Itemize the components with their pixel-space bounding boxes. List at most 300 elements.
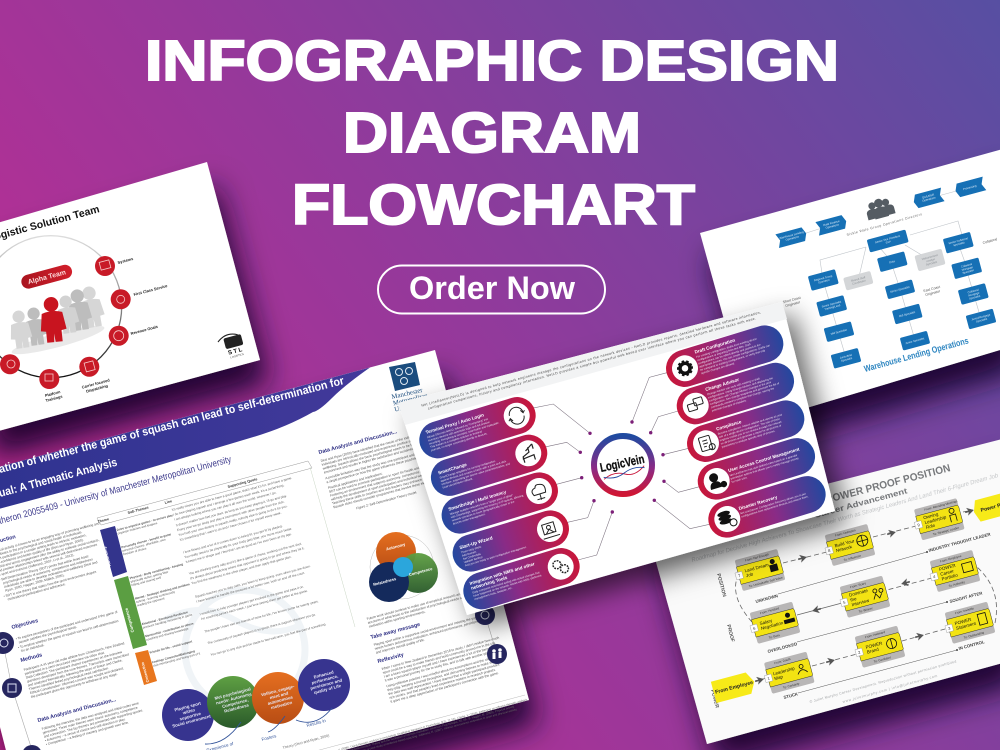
pill: start-up wizard: Set Credentials — [462, 552, 482, 561]
node labels: First Class Service — [133, 283, 169, 297]
reflexivity body: they play, keeping a journal throughout, and discussing themes to make sure — [387, 659, 496, 692]
step 7: land dream job: Land Dream — [744, 562, 769, 573]
table supporting quotes: I would love to help younger players get involved in the game and pass it on. — [199, 584, 305, 616]
poster body: methods: Data Collection: The participant shared experiences on the interview — [25, 650, 123, 680]
step 1: leadership map: To: Certainty — [782, 681, 800, 690]
connectors — [532, 372, 714, 561]
right column body: wellbeing. Squash allows the basic psychological needs to be fulfilled in a supportive — [322, 435, 443, 471]
panel: logicvein network diagram — [398, 302, 835, 615]
reflexivity body: I am a keen squash player myself and I have experienced a lot of the benefits; — [383, 645, 495, 679]
poster body: methods: the participant given the opportunity to withdraw at any stage. — [30, 672, 118, 699]
intro band — [398, 302, 787, 425]
order now button — [378, 266, 605, 314]
pill: draft configuration: configurations or importing from text files. Draft — [697, 342, 751, 362]
poster body: introduction: psychological needs of autonomy, competence and relatedness — [3, 557, 94, 585]
step 6: salary negotiation: 6 — [753, 625, 757, 631]
step 4: power career portfolio: From: Employee — [940, 554, 962, 563]
title: DIAGRAM — [343, 101, 641, 165]
STL logo: STL — [228, 347, 244, 357]
table subthemes: solving - learning continuously — [136, 590, 176, 604]
org chart box labels: Operation — [818, 278, 831, 285]
flow arrow heads — [754, 506, 975, 685]
connector dots — [579, 420, 666, 514]
intro text: configuration comparisons, history and compliancy information. NetLD provides a simple but powerful web based user interface where you can perform all these tasks with ease. — [428, 317, 756, 411]
org chart box labels: Junior Specialist — [905, 336, 925, 345]
step 4: power career portfolio: To: Authority — [948, 580, 966, 588]
pill: start-up wizard — [448, 506, 574, 576]
level lines — [778, 551, 958, 693]
org chart box labels: Senior Vice President — [875, 235, 900, 244]
org chart box labels: Junior/Mortgage — [971, 314, 991, 321]
ribbon labels: Operations — [825, 222, 840, 230]
node icons — [7, 260, 125, 381]
pill: smartchange: local cancel/close rollback. — [442, 476, 474, 489]
pill: draft configuration — [661, 321, 788, 392]
take away body: Playing sport within a supportive social environment and meeting the psychological — [373, 612, 491, 647]
reflexivity body: sport could be a way to make friends and build community around me in the city. — [382, 641, 496, 675]
pill: change advisor: configuration with Change Advisor changes to the prior — [708, 380, 772, 403]
body below venn: accounts of what leads to the satisfaction of psychological needs and self-determined — [367, 589, 489, 625]
level labels: OVERLOOKED — [767, 641, 798, 654]
table supporting quotes: It's really where you are able to have a good game, that's what it's for, and have a game. — [171, 476, 293, 512]
pill: terminal proxy: inventory devices with automatic login and full session — [428, 420, 491, 443]
table supporting quotes: It doesn't matter how fast you start, as long as you keep playing it, I'll go and play. — [175, 494, 288, 527]
step 8: build your network: Build Your — [834, 538, 855, 548]
originator labels: Collateral — [982, 237, 998, 245]
reflexivity body: Using reflective practice I was mindful about my assumptions and the role that — [386, 655, 497, 688]
pill: start-up wizard: Three easy steps: — [460, 544, 482, 554]
level labels — [755, 531, 992, 700]
poster body: objectives: for an individual. — [21, 643, 45, 653]
pill: terminal proxy: This feature is a complete solution to terminal — [430, 429, 483, 449]
table subthemes: Personally chosen - benefit to game — [121, 532, 172, 549]
table supporting quotes: You really need to be physically fit, your body gets fitter, you move much better. — [184, 527, 293, 559]
pill: smartbridge: network operators to cover geographically closer to the — [451, 499, 515, 522]
org chart connectors — [800, 190, 981, 358]
pill: smartchange — [426, 430, 552, 501]
right column body: Figure 2: Self-Determination Theory model — [356, 490, 417, 510]
pill: smartbridge: devices under management. — [452, 512, 486, 526]
table subthemes: organise matches and leagues — [117, 521, 158, 535]
node labels: Dispatching — [86, 383, 109, 394]
pill: integration with nms: management tools, Nmstate, etc. — [474, 586, 513, 601]
theme block: competence — [114, 576, 147, 649]
pill: start-up wizard: Start-Up Wizard — [459, 535, 493, 550]
table subthemes: personal choices, affordable, own — [122, 537, 166, 553]
panel: power proof position roadmap — [647, 437, 1000, 744]
pill: smartchange: interface, supporting per device value parameterization, and — [441, 461, 511, 486]
step 2: power brand: Brand — [866, 647, 880, 655]
table subthemes: physically active; getting fitter — [130, 570, 169, 584]
step 6: salary negotiation — [747, 602, 800, 645]
pill: draft configuration: specific changes are allowed. — [701, 361, 736, 375]
org chart box labels: Mortgage — [968, 291, 980, 298]
step 2: power brand — [852, 626, 905, 669]
flow arrows and labels: Theory (Deci and Ryan, 2000) — [282, 734, 330, 750]
pill: compliance: parameters to analyze specific step of devices. — [721, 429, 776, 449]
pill: change advisor: Change Advisor — [705, 377, 740, 392]
table supporting quotes: The people I have met are friends of mine for life, I've known some for twenty years. — [204, 599, 319, 634]
poster headings — [0, 429, 421, 724]
table subthemes: hitting and moving well — [131, 575, 162, 587]
panel: warehouse lending operations — [700, 147, 1000, 424]
step 3: power statement: POWER — [954, 617, 972, 626]
node labels: Systems — [117, 256, 134, 265]
level labels: SOUGHT AFTER — [949, 590, 984, 604]
ring — [0, 236, 122, 378]
pill: change advisor: configuration. See change snapshots and generate the list of — [709, 381, 780, 406]
table supporting quotes: It's something that I want to do and I have chosen it for myself every week. — [179, 511, 282, 542]
poster headings: Take away message — [370, 622, 421, 641]
poster body: discussion: • Autonomy – a sense of choice and self-direction in play. — [44, 717, 126, 743]
org chart box labels: Mid Specialist — [830, 328, 848, 336]
pill: draft configuration: appropriate devices. You can create configurations. Drafts can — [699, 343, 771, 369]
poster body: objectives: • To explore perceptions of the participant and understand if the game of — [15, 610, 118, 641]
ribbon labels — [779, 183, 977, 243]
node labels — [44, 256, 169, 403]
pill: integration with nms: Early compares automated syslog with actual changes that — [472, 570, 540, 595]
central logicvein logo: LogicVein — [599, 452, 646, 475]
pill: terminal proxy: Terminal Proxy / Auto Login — [425, 412, 485, 435]
step 9: owning leadership role: To: Strategic Leader — [932, 526, 959, 536]
self determination flow circles: Enhanced — [313, 669, 334, 680]
right column body: Practical applications and implications: — [327, 472, 383, 490]
step 4: power career portfolio — [927, 550, 980, 593]
step 1: leadership map — [761, 652, 815, 695]
reflexivity body: it was a personal journey for me to study this, and to talk with another player. — [384, 650, 494, 683]
side labels: PROOF — [725, 624, 735, 643]
take away body: and improves overall quality of life. — [375, 638, 425, 655]
org chart box labels: Training/Lead — [824, 303, 841, 311]
university logo: Manchester — [391, 387, 423, 401]
right column body: will help the development of sport participation and individual wellbeing. — [331, 471, 432, 502]
central logicvein logo — [594, 436, 652, 494]
poster body: introduction: individuals are able to develop motivation and wellbeing (Deci and — [4, 560, 98, 589]
pill: smartchange: against devices and creates a batch with a point and click — [440, 459, 507, 483]
directors label: Sickle Wale Group Operations Directors — [846, 212, 923, 237]
step 5: dominate the interview: Dominate — [848, 588, 868, 598]
right column body: Teaching these skills to coaches and club leaders may enhance motivation. — [332, 473, 439, 505]
level labels: IN CONTROL — [958, 639, 985, 651]
pill: user access control management — [693, 433, 820, 504]
pill: start-up wizard: Add Domain — [461, 549, 477, 558]
pill: terminal proxy — [415, 392, 540, 463]
step 7: land dream job: To: Unshakable Self Value — [748, 575, 783, 588]
poster body: methods: and analysed thematically, following the steps of Braun and Clarke. — [27, 658, 123, 687]
table supporting quotes: Every year we go away and play a tournament with other people from the club. — [177, 500, 285, 532]
panel: squash research poster — [0, 350, 530, 750]
table header: Supporting Quote — [227, 477, 258, 489]
end hexagon: power position — [971, 488, 1000, 523]
step 3: power statement — [942, 602, 995, 645]
table supporting quotes: I love fitness and a lot of it comes down to being fit, you get fit by playing. — [183, 524, 283, 554]
step 3: power statement: Statement — [955, 621, 977, 631]
org chart box labels: SVP — [885, 239, 892, 245]
theme block: connection — [135, 650, 157, 685]
service nodes — [0, 256, 131, 389]
right column body: environment and results in higher life satisfaction and sustained participation. — [323, 442, 433, 475]
org chart box labels: Specialist — [962, 268, 974, 275]
table header: Sub-Themes — [127, 506, 149, 515]
panel: logistic solution team — [0, 162, 260, 436]
table supporting quotes: It's always about predicting where that opponent is going to go and where they hit it. — [190, 546, 305, 581]
table subthemes: coaching and sharing knowledge — [146, 626, 189, 642]
org chart boxes — [808, 230, 996, 369]
step 9: owning leadership role: Role — [925, 523, 936, 530]
table subthemes: Mental - Strategic thinking and problem — [135, 582, 190, 601]
pill: integration with nms: networking Tools — [470, 575, 508, 591]
reflexivity body: It gave me a deep appreciation of the participant's connection with the game. — [390, 671, 499, 704]
title: INFOGRAPHIC DESIGN — [145, 29, 839, 93]
self determination flow circles: Volition, engage- — [260, 684, 295, 697]
warehouse lending operations heading: Warehouse Lending Operations — [863, 335, 970, 374]
take away body: needs fosters autonomous motivation, enhanced performance, persistence — [374, 619, 481, 651]
self determination flow circles: Social environment — [172, 713, 212, 729]
pill: smartchange: SmartChange — [437, 462, 468, 475]
step 7: land dream job: 7 — [738, 573, 742, 578]
side labels: POWER — [709, 689, 720, 709]
table supporting quotes: Squash teaches you to stay calm, you learn to keep going, even when you are down. — [195, 564, 311, 599]
pill: draft configuration: configurations can be edited directly and pushed to the — [698, 342, 762, 365]
university logo: Metropolitan — [392, 392, 429, 407]
step 5: dominate the interview: Interview — [851, 598, 870, 607]
pill: draft configuration: Draft Configuration — [694, 337, 736, 355]
pill: smartbridge: Smartbridge / Multi tenancy — [448, 489, 507, 512]
pill: change advisor: Change Advisor can work with existing or draft — [706, 376, 760, 396]
roadmap heading: Career Advancement — [813, 486, 909, 520]
alpha team badge: Alpha Team — [27, 269, 67, 286]
roadmap heading — [813, 462, 952, 520]
pill: disaster recovery — [704, 471, 830, 542]
table subthemes: Drive to organise games - to ensure play — [116, 513, 173, 532]
self determination flow circles: persistence and — [310, 677, 343, 691]
originator labels: Originator — [925, 289, 942, 297]
self determination flow circles: Relatedness — [224, 702, 250, 714]
poster header band — [0, 368, 370, 510]
self determination flow circles: ment and — [269, 690, 289, 700]
originator labels: East Coast — [923, 285, 941, 293]
level labels: INDUSTRY THOUGHT LEADER — [928, 531, 992, 553]
pill: integration with nms — [459, 543, 584, 614]
reflexivity body: rich stories, and that people's lived experience matters in research projects. — [389, 668, 496, 700]
ribbons — [775, 177, 986, 248]
org chart box labels: Specialist — [975, 317, 988, 324]
step 9: owning leadership role: From: Attending Meetings — [924, 499, 958, 512]
STL logo — [217, 331, 246, 361]
poster watermark — [165, 590, 305, 710]
table subthemes: Physical - Body conditioning - keeping — [129, 562, 184, 580]
pill: compliance: engines enable you to run checks through the network — [719, 419, 783, 442]
poster headings: Objectives — [11, 618, 39, 631]
body below venn: Future work should continue to make use of empirical research and qualitative — [366, 588, 478, 621]
poster body: methods: Participant: A 41-year-old male athlete from Christchurch, New Zealand, — [23, 641, 126, 672]
author line: theron 20055409 - University of Manchester Metropolitan University — [0, 454, 233, 527]
table supporting quotes: I'm coaching juniors each week, I just love seeing them get better at the game. — [200, 589, 308, 621]
originator labels — [782, 237, 998, 308]
org chart box labels: Collateral — [961, 263, 972, 269]
step 6: salary negotiation: To: Boss — [768, 633, 781, 640]
theme block: autonomy: Autonomy — [102, 545, 112, 567]
poster body: methods: participated in a semi-structured interview via video chat. — [24, 651, 105, 676]
pill: user access control management: permission system that allows you to easily manage access — [730, 456, 800, 481]
step 8: build your network: Network — [835, 544, 853, 553]
university logo: University — [394, 400, 424, 414]
STL logo: LOGISTICS — [230, 352, 245, 359]
roadmap tagline: Roadmap for Decisive High Achievers To Showcase Their Worth as Strategic Leaders And Land Their 6-Figure Dream Job — [691, 473, 1000, 564]
org chart box labels: Specialist — [925, 260, 938, 267]
order now button: Order Now — [409, 270, 575, 306]
flow arrows — [736, 510, 997, 681]
pill: terminal proxy: recording. Everything is recorded, searchable and replayable. — [429, 420, 500, 446]
pill: user access control management: User Access Control Management — [727, 446, 800, 473]
org chart box labels: Regional Group — [814, 275, 833, 282]
table subthemes: Friends for life - social support — [149, 639, 193, 655]
ribbon labels: Operations — [922, 195, 937, 203]
step 5: dominate the interview: 5 — [843, 599, 847, 605]
theme block: connection: Connection — [141, 661, 150, 683]
step 5: dominate the interview: From: Scary — [850, 581, 867, 589]
org chart box labels: Coordinator — [852, 278, 866, 286]
pill: integration with nms: have happened on the network. Works with NMS, platforms, — [473, 573, 543, 598]
step 5: dominate the interview: To: Winner — [858, 606, 873, 614]
venn diagram: Competence — [408, 566, 434, 577]
step 6: salary negotiation: Negotiation — [760, 620, 784, 631]
step 7: land dream job: From: Not Enough — [745, 552, 770, 562]
icon: directors group — [864, 195, 896, 221]
pill: compliance — [682, 396, 809, 467]
table subthemes: Feelings Connected/Belonging — [152, 649, 195, 664]
table supporting quotes: You hold your own destiny in squash really, nobody else is going to do it for you. — [178, 504, 288, 537]
poster side icons — [0, 605, 507, 750]
poster body: introduction: Ryan, 2000; Hagger, 2009; Mallett, 2005). — [5, 573, 65, 593]
step 1: leadership map: 1 — [767, 675, 771, 681]
self determination flow circles: needs: Autonomy, — [215, 691, 252, 706]
self determination flow circles: supportive — [179, 711, 202, 721]
org chart box labels: Analyst — [926, 257, 936, 263]
step 6: salary negotiation: Salary — [759, 618, 773, 626]
flow arrows and labels: Fosters — [261, 733, 277, 742]
poster headings: Data Analysis and Discussion... — [318, 429, 398, 456]
table subthemes: reading the opponent — [136, 596, 165, 608]
self determination flow circles: Competence, — [222, 697, 249, 709]
poster body: introduction: motivational participation and adherence. — [7, 582, 66, 601]
step 9: owning leadership role: Leadership — [924, 514, 947, 525]
level labels: STUCK — [783, 691, 799, 700]
org chart box labels: Mid Specialist — [899, 310, 916, 318]
step 4: power career portfolio: Career — [940, 568, 955, 577]
pill: smartbridge: Manage multiple networks from a “single pane of glass” — [449, 493, 514, 516]
poster headings: Reflexivity — [377, 652, 405, 665]
poster body: discussion: and connection. The lay themes are presented with supporting quotes. — [43, 708, 144, 739]
table supporting quotes: You are thinking every rally and it's like a game of chess, working out the next shot. — [188, 542, 303, 576]
right column body: a single perspective on how the game influences these psychological outcomes. — [326, 450, 440, 484]
node labels: Revenue Goals — [130, 324, 158, 336]
reflexivity body: the data was well represented. I have learned that a single participant provides — [388, 662, 500, 696]
poster body: methods: Ethical Consideration: Informed consent was sought and obtained, — [29, 666, 124, 695]
table supporting quotes: I have learned to handle the pressure a lot better now, both on and off the court. — [196, 571, 306, 604]
step 4: power career portfolio: 4 — [933, 574, 937, 579]
side labels: POSITION — [715, 573, 727, 598]
pill: disaster recovery: Net LineDancer Configuration Recovery allows you to put — [740, 492, 806, 515]
pill: compliance: on all devices and generate a report for all devices or — [720, 423, 782, 446]
roadmap footer: © Juliet Murphy Career Development. Reproduction without permission prohibited — [809, 659, 957, 704]
self determination flow circles: performance, — [311, 673, 339, 685]
poster body: discussion: generated. Three main themes were found: autonomy, competence — [42, 706, 138, 735]
table supporting quotes: It keeps me in shape and I feel that I am as good as I've ever been at my age. — [185, 532, 292, 564]
poster body: introduction: • Self-Determination Theory (SDT) posits that within three basic — [0, 554, 89, 582]
pill: smartbridge: with Smartbridge, supporting the tenancy of IP spaces, allowing — [450, 493, 524, 519]
step 7: land dream job — [732, 549, 785, 592]
poster body: objectives: squash satisfies the psychological needs. — [18, 625, 78, 644]
pill: compliance: Compliance — [716, 419, 742, 432]
org chart box labels: Mortgage — [961, 265, 974, 272]
poster title: ation of whether the game of squash can lead to self-determination for — [0, 375, 346, 476]
table subthemes: Emotional - Emotional Resilience — [141, 610, 189, 626]
pill: draft configuration: For creating configuration, drafts from existing device — [696, 337, 758, 359]
step 3: power statement: From: Invisible — [955, 606, 975, 615]
right column body: A possible limitation was that the study was one participant and that it only gave — [325, 446, 438, 480]
start hexagon: from employee — [711, 671, 757, 703]
step 5: dominate the interview — [837, 576, 890, 619]
reflexivity body: When I came to New Zealand in December 2018 to study, I didn't realise how much — [381, 636, 500, 671]
self determination flow circles: within — [181, 707, 196, 716]
org chart box labels: Specialist — [840, 356, 853, 363]
body below venn: motivation within sporting environments. — [368, 610, 426, 629]
node labels: Platform — [44, 389, 61, 398]
alpha team badge — [20, 263, 74, 290]
org chart box labels: Shared Staff — [851, 276, 866, 283]
table supporting quotes: I am always looking where you can play it all over the world, wherever I go. — [174, 490, 277, 522]
self determination flow circles: motivation — [270, 700, 293, 710]
poster headings: Methods — [20, 652, 43, 664]
right column body: Squash clubs should consider programmes that involve these elements. — [333, 478, 435, 509]
table supporting quotes: You can go to any club and be made to feel welcome, you feel like part of something. — [210, 622, 327, 657]
pill: compliance: role of a single device configuration. The role of these — [718, 417, 781, 439]
org chart box labels: Junior/Mid — [839, 354, 852, 360]
org chart box labels: Specialist — [969, 294, 981, 301]
pill: disaster recovery: configurations from replacement devices and restore them. — [741, 494, 809, 519]
table header — [97, 461, 355, 627]
title — [145, 29, 839, 237]
flow arrows and labels — [205, 708, 332, 750]
pill: compliance: Become compliance. Assure reliable and reports as your — [717, 412, 783, 436]
org chart box labels — [813, 234, 992, 363]
self determination flow circles: autonomous — [267, 694, 294, 706]
step 1: leadership map: Map — [774, 674, 784, 681]
step 7: land dream job: Job — [745, 571, 754, 578]
poster title: ual: A Thematic Analysis — [0, 457, 119, 500]
right column body: individuals are intrinsically motivated and experience positive social environments and — [321, 430, 444, 467]
table header: Line — [164, 499, 172, 505]
step 6: salary negotiation: From: Hesitant — [760, 606, 780, 615]
pill: start-up wizard: And you are ready to start configuration management. — [464, 545, 527, 567]
step 1: leadership map: From: Doubt — [774, 657, 791, 665]
side labels — [709, 573, 735, 709]
level labels: UNKNOWN — [755, 593, 778, 604]
table subthemes: freedom of choice — [123, 546, 147, 556]
originator labels: Short Coast — [782, 296, 801, 304]
step 3: power statement: To: Outstanding — [963, 630, 985, 640]
ribbon labels: Rate Finance — [823, 219, 840, 227]
venn diagram: Relatedness — [373, 576, 397, 587]
roadmap footer: www.julietmurphy.com | info@julietmurphy.com — [842, 674, 938, 704]
table supporting quotes: The community of squash players is so great; there is support wherever you go. — [207, 612, 317, 645]
step 5: dominate the interview: the — [850, 596, 858, 603]
grey org chart boxes — [843, 249, 946, 291]
step 8: build your network: To: Influencer — [843, 554, 862, 562]
step 4: power career portfolio: POWER — [938, 563, 956, 572]
poster headings: Data Analysis and Discussion... — [37, 697, 117, 724]
